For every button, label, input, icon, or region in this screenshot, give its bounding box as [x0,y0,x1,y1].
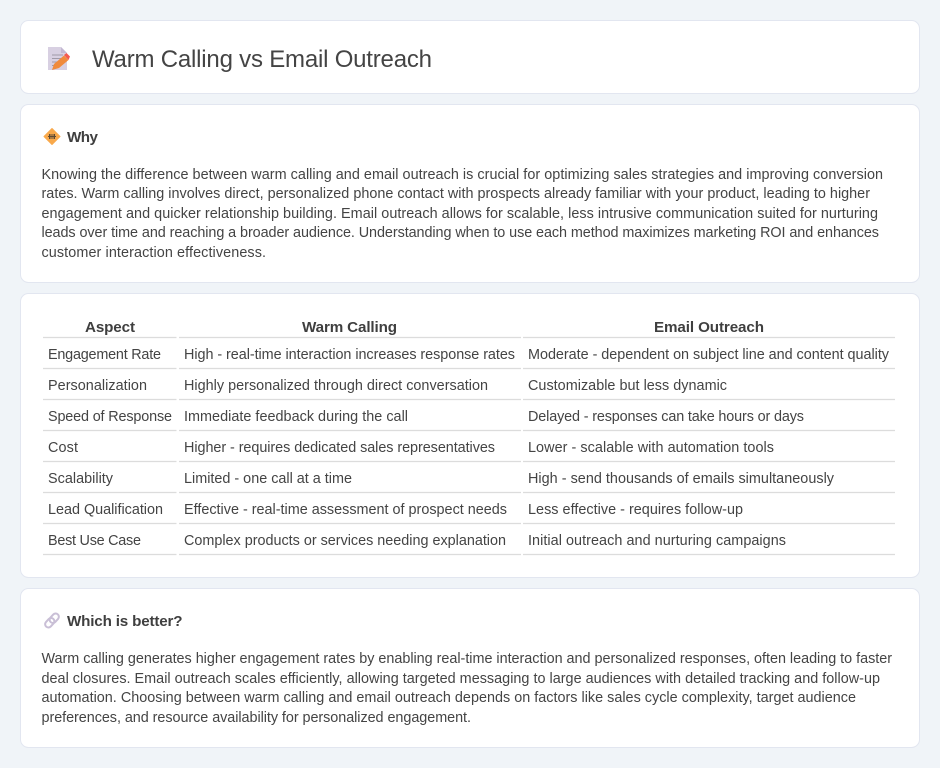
row: personalization: Personalization [48,378,147,394]
panel: why [20,104,920,282]
row: lead qualification: Effective - real-time assessment of prospect needs [184,502,507,518]
text block: why paragraph [42,167,883,261]
text block: why paragraph: rates. Warm calling involves direct, personalized phone contact with prospects already familiar with your product, leading to higher [42,186,870,202]
text block: why paragraph: customer interaction effectiveness. [42,245,266,261]
row: lead qualification: Less effective - requires follow-up [528,502,743,518]
table header: Aspect [85,319,135,336]
row: personalization: Highly personalized through direct conversation [184,378,488,394]
table header: Warm Calling [302,319,397,336]
row: engagement rate: Engagement Rate [48,347,161,363]
row: engagement rate: Moderate - dependent on subject line and content quality [528,347,890,363]
row: best use case: Complex products or services needing explanation [184,533,506,549]
text block: which is better paragraph: automation. Choosing between warm calling and email outreach depends on factors like sales cycle complexity, target audience [42,690,856,706]
icon: link [44,612,60,629]
table grid lines [43,338,895,554]
row: cost: Higher - requires dedicated sales representatives [184,440,495,456]
panel: which is better [20,588,920,748]
text block: which is better paragraph: deal closures. Email outreach scales efficiently, allowing targeted messaging to large audiences with detailed tracking and follow-up [42,671,880,687]
row: speed of response: Speed of Response [48,409,172,425]
row: speed of response [48,409,804,425]
row: speed of response: Delayed - responses can take hours or days [528,409,804,425]
row: lead qualification: Lead Qualification [48,502,163,518]
text block: which is better paragraph [42,651,892,726]
row: best use case [48,533,786,549]
heading: why: Why [67,129,99,146]
icon: document with pencil [48,47,70,70]
text block: why paragraph: leads over time and reaching a broader audience. Understanding when to use each method maximizes marketing ROI and enhances [42,225,879,241]
panel: title [20,20,920,94]
text block: why paragraph: Knowing the difference between warm calling and email outreach is crucial for optimizing sales strategies and improving conversion [42,167,883,183]
row: engagement rate [48,347,890,363]
heading: which is better: Which is better? [67,613,182,630]
table header: Email Outreach [654,319,764,336]
row: best use case: Best Use Case [48,533,141,549]
panel: comparison table [20,294,920,578]
row: engagement rate: High - real-time interaction increases response rates [184,347,515,363]
row: scalability: High - send thousands of emails simultaneously [528,471,835,487]
row: cost: Cost [48,440,78,456]
row: cost [48,440,774,456]
text block: why paragraph: engagement and quicker relationship building. Email outreach allows for scalable, less intrusive communication suited for nurturing [42,206,878,222]
icon: diamond sign [44,128,60,144]
title text: Warm Calling vs Email Outreach [92,46,432,73]
row: personalization [48,378,727,394]
row: best use case: Initial outreach and nurturing campaigns [528,533,786,549]
table header [85,319,764,336]
text block: which is better paragraph: Warm calling generates higher engagement rates by enabling real-time interaction and personalized responses, often leading to faster [42,651,892,667]
row: scalability: Limited - one call at a time [184,471,352,487]
row: speed of response: Immediate feedback during the call [184,409,408,425]
row: personalization: Customizable but less dynamic [528,378,727,394]
row: scalability: Scalability [48,471,114,487]
row: cost: Lower - scalable with automation tools [528,440,774,456]
row: lead qualification [48,502,743,518]
text block: which is better paragraph: preferences, and resource availability for personalized engagement. [42,710,471,726]
row: scalability [48,471,835,487]
